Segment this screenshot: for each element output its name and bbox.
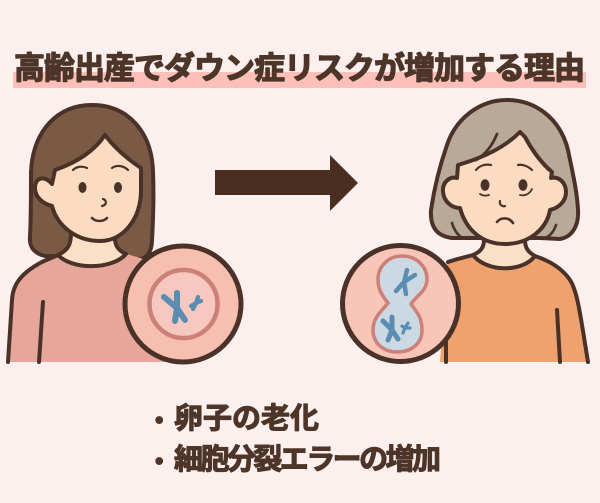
eyes [480, 179, 490, 191]
title: 高齢出産でダウン症リスクが増加する理由 [14, 51, 585, 86]
bullet list: • [155, 448, 163, 475]
mouth [497, 218, 513, 223]
neck [473, 240, 535, 268]
magnifier: healthy egg cell [125, 246, 241, 362]
chromosomes [164, 293, 201, 321]
eyes [78, 182, 86, 193]
nose [102, 199, 106, 206]
brows [73, 166, 128, 170]
illustration: young woman [8, 105, 170, 362]
shirt [440, 255, 588, 362]
face [35, 135, 141, 241]
shirt [8, 254, 170, 362]
nose [500, 201, 505, 206]
illustration: older woman [431, 100, 588, 362]
hair [431, 100, 578, 239]
bullet list: • [155, 407, 163, 434]
face [443, 132, 566, 244]
neck [58, 233, 126, 266]
eye bags [480, 189, 532, 196]
arrow [215, 155, 358, 211]
bangs strand [476, 134, 497, 160]
mouth [92, 218, 107, 221]
bullet list: 細胞分裂エラーの増加 [174, 443, 441, 476]
bullet list: 卵子の老化 [174, 402, 319, 435]
chromosomes [383, 270, 415, 340]
dividing cell [373, 256, 427, 352]
brows [476, 165, 532, 170]
bullet list [155, 402, 441, 476]
magnifier: dividing cell [342, 246, 458, 362]
hair [30, 105, 153, 259]
